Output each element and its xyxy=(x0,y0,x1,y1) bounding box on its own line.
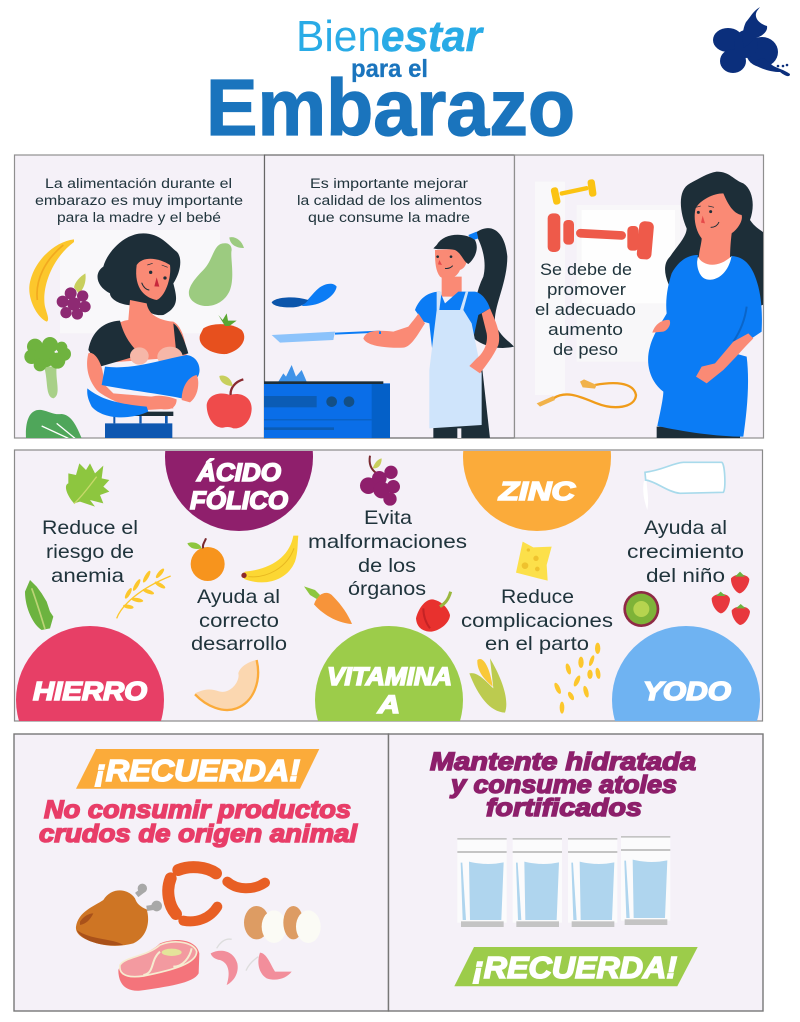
icon: spinach leaf xyxy=(66,463,109,507)
panel: nutrients xyxy=(14,449,764,722)
text: nutrition importance xyxy=(35,176,243,225)
title: para el xyxy=(351,55,428,83)
icons: left food group xyxy=(25,456,400,710)
icon: chicken xyxy=(76,884,162,946)
heading: raw animal products warning: crudos de origen animal xyxy=(39,820,358,848)
nutrient: ácido fólico: ÁCIDO xyxy=(196,458,282,487)
text: vitamina a benefit: correcto xyxy=(199,610,279,632)
figure: pregnant woman xyxy=(648,172,767,438)
text: hierro benefit xyxy=(42,517,138,587)
text: nutrition importance: para la madre y el bebé xyxy=(57,210,221,225)
text: hierro benefit: Reduce el xyxy=(42,517,138,539)
icon: glass 3 xyxy=(568,838,617,927)
text: ácido fólico benefit: Evita xyxy=(364,507,412,529)
text: ácido fólico benefit: de los xyxy=(358,555,416,577)
panel: nutrition during pregnancy xyxy=(14,155,264,438)
icon: eggs xyxy=(244,906,321,943)
icon: lettuce xyxy=(26,410,82,438)
text: hierro benefit: riesgo de xyxy=(46,541,134,563)
text: zinc benefit xyxy=(461,586,613,655)
icon: banana xyxy=(29,239,74,322)
text: hierro benefit: anemia xyxy=(51,565,124,587)
heading: hydration message: y consume atoles xyxy=(449,771,677,799)
text: healthy weight: aumento xyxy=(548,321,623,339)
icon: grapes xyxy=(57,273,91,320)
nutrient: vitamina a: A xyxy=(377,691,400,719)
text: healthy weight: Se debe de xyxy=(540,261,632,279)
icon: wheat xyxy=(117,567,171,618)
icon: glass 2 xyxy=(513,838,562,927)
text: nutrition importance: La alimentación durante el xyxy=(45,176,232,191)
banner: recuerda green: ¡RECUERDA! xyxy=(473,950,677,985)
illustration: raw foods xyxy=(76,867,321,991)
nutrient: hierro: HIERRO xyxy=(33,676,147,706)
title xyxy=(206,12,575,152)
panel: food quality xyxy=(264,155,514,438)
nutrient: ácido fólico: FÓLICO xyxy=(190,486,289,515)
icon: small dumbbell xyxy=(550,179,597,205)
icon: milk bottle xyxy=(643,462,725,510)
heading: hydration message: fortificados xyxy=(486,794,642,822)
text: vitamina a benefit xyxy=(191,586,287,655)
nutrient: zinc xyxy=(463,451,611,531)
title: estar xyxy=(381,12,485,61)
icon: broccoli xyxy=(24,337,71,398)
illustration: water glasses xyxy=(457,836,670,927)
icon: strawberries xyxy=(712,572,750,625)
nutrient: yodo xyxy=(612,626,760,721)
text: nutrition importance: embarazo es muy importante xyxy=(35,193,243,208)
icon: shrimp 1 xyxy=(211,939,238,985)
text: food quality xyxy=(297,176,482,225)
text: food quality: la calidad de los alimentos xyxy=(297,193,482,208)
icon: green leaf xyxy=(25,580,53,630)
text: ácido fólico benefit xyxy=(308,507,467,600)
icon: flipping pancake xyxy=(272,284,337,307)
illustration: mother and foods xyxy=(24,230,252,438)
text: healthy weight: de peso xyxy=(553,341,618,359)
nutrient: vitamina a xyxy=(315,626,463,721)
text: healthy weight: promover xyxy=(547,281,627,299)
banner: recuerda orange: ¡RECUERDA! xyxy=(95,753,300,788)
icon: shrimp 2 xyxy=(246,953,292,980)
text: healthy weight: el adecuado xyxy=(535,301,636,319)
heading: raw animal products warning: No consumir productos xyxy=(44,796,351,824)
text: yodo benefit: crecimiento xyxy=(627,541,744,563)
text: zinc benefit: complicaciones xyxy=(461,610,613,632)
icon: red pepper xyxy=(416,592,451,632)
text: food quality: que consume la madre xyxy=(308,210,470,225)
title: Bien xyxy=(296,12,381,61)
text: healthy weight xyxy=(535,261,636,359)
text: ácido fólico benefit: órganos xyxy=(348,578,426,600)
nutrient: zinc: ZINC xyxy=(498,476,577,506)
nutrient: hierro xyxy=(16,626,164,721)
illustration: cooking scene xyxy=(264,228,514,438)
icon: purple grapes xyxy=(360,456,400,506)
nutrient: ácido fólico xyxy=(165,451,313,531)
icon: flame xyxy=(278,365,307,382)
logo: blue butterfly flower xyxy=(713,7,790,76)
icons: right food group xyxy=(416,462,750,714)
text: food quality: Es importante mejorar xyxy=(310,176,469,191)
icon: orange xyxy=(187,538,225,581)
icon: jump rope xyxy=(537,379,636,407)
icon: banana xyxy=(241,536,298,582)
nutrient: vitamina a: VITAMINA xyxy=(327,663,452,691)
text: yodo benefit xyxy=(627,517,744,587)
text: vitamina a benefit: desarrollo xyxy=(191,633,287,655)
icon: glass 1 xyxy=(457,838,507,927)
text: zinc benefit: Reduce xyxy=(501,586,574,608)
icon: steak xyxy=(118,940,199,991)
icon: carrot xyxy=(304,586,352,624)
icon: large dumbbell xyxy=(548,213,654,260)
icon: frying pan xyxy=(272,332,380,343)
heading: raw animal products warning xyxy=(39,796,358,848)
title: Embarazo xyxy=(206,63,575,152)
figure: woman cooking xyxy=(363,228,514,438)
icon: glass 4 xyxy=(621,836,670,925)
panel: reminder raw animal products xyxy=(14,734,388,1011)
icon: corn kernels xyxy=(553,643,601,714)
icon: pear xyxy=(189,237,244,306)
heading: hydration message xyxy=(430,748,696,822)
heading: hydration message: Mantente hidratada xyxy=(430,748,696,776)
nutrient: yodo: YODO xyxy=(643,676,731,706)
icon: apple xyxy=(207,376,252,428)
text: ácido fólico benefit: malformaciones xyxy=(308,531,467,553)
panel: hydration reminder xyxy=(388,734,763,1011)
panel: healthy weight gain xyxy=(514,155,767,438)
text: yodo benefit: Ayuda al xyxy=(644,517,727,539)
icon: melon slice xyxy=(195,660,258,710)
text: yodo benefit: del niño xyxy=(646,565,725,587)
icon: stove xyxy=(264,381,390,438)
icon: tomato xyxy=(200,313,244,354)
text: vitamina a benefit: Ayuda al xyxy=(197,586,280,608)
icon: corn xyxy=(469,658,506,713)
illustration: exercise items and pregnant woman xyxy=(535,172,767,438)
icon: kiwi xyxy=(623,591,659,627)
icon: sausages xyxy=(168,867,265,921)
figure: mother breastfeeding xyxy=(87,233,200,438)
icon: cheese xyxy=(516,542,552,581)
text: zinc benefit: en el parto xyxy=(485,633,589,655)
